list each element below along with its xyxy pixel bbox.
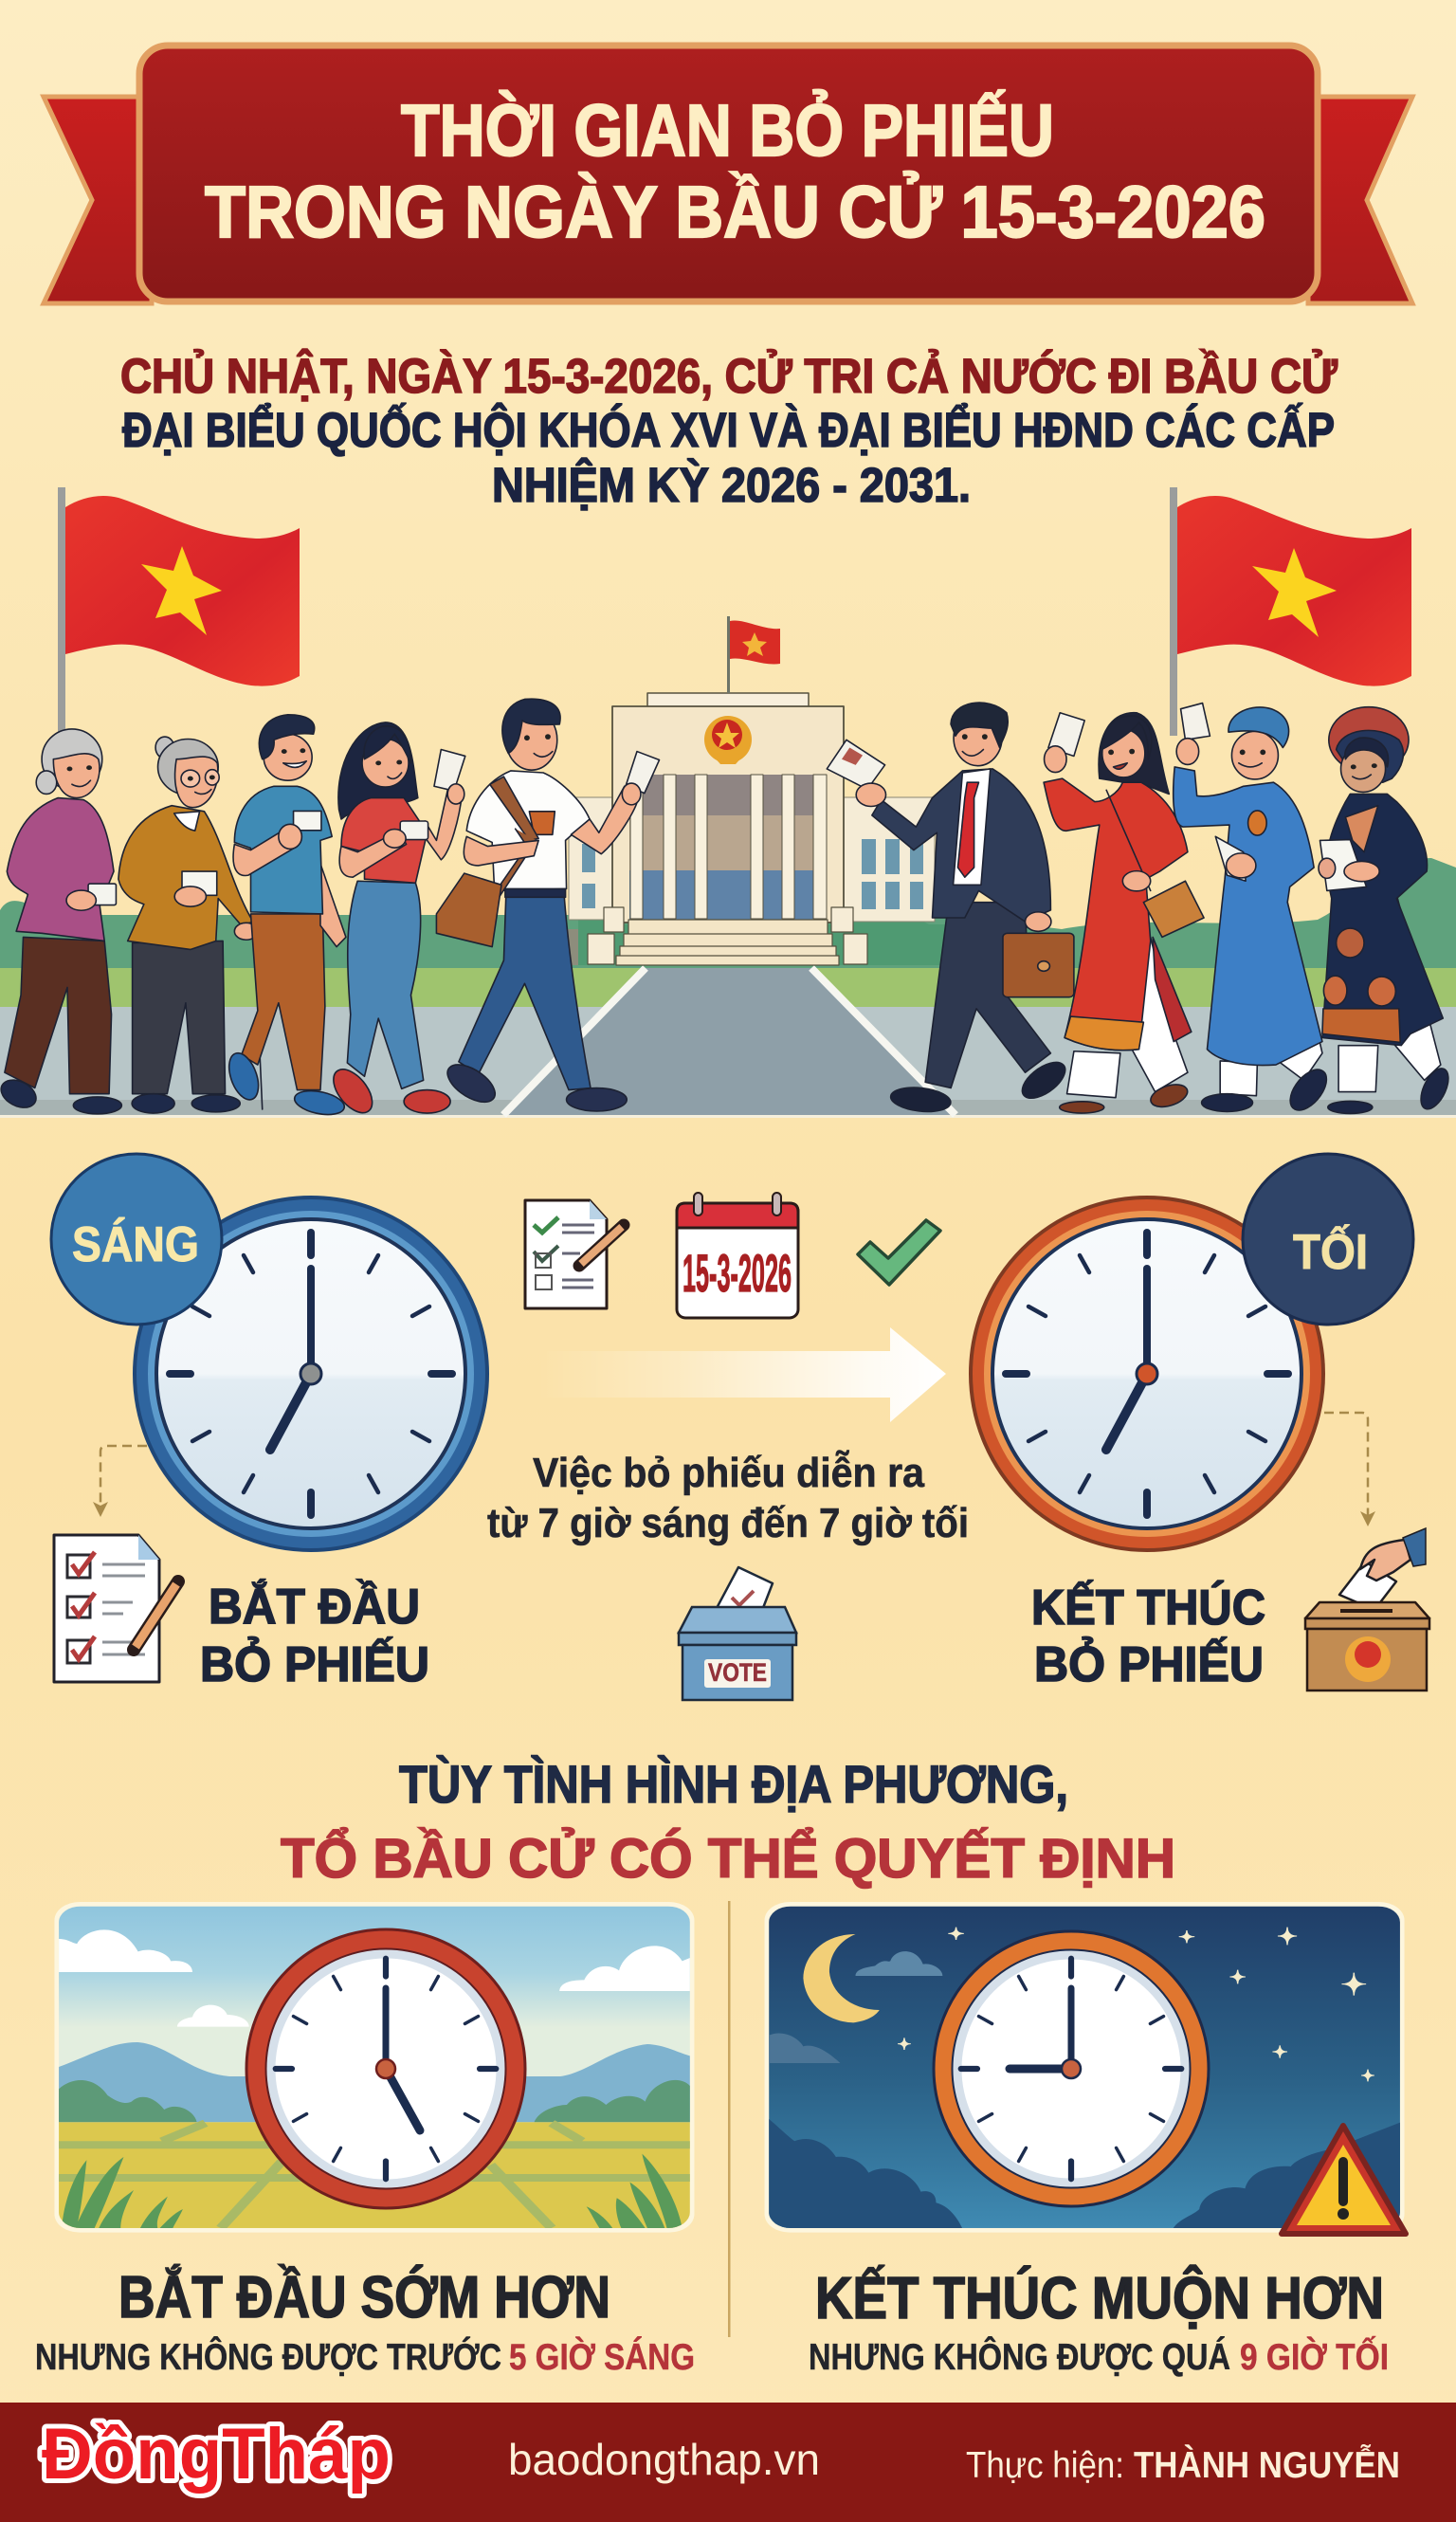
label: end of voting: BỎ PHIẾU [1034,1636,1264,1692]
voter: man in blue ao dai [1174,704,1334,1115]
heading: local decision: TỔ BẦU CỬ CÓ THỂ QUYẾT ĐỊNH [281,1828,1175,1890]
arrow: morning to evening [538,1327,946,1422]
left ribbon [44,97,152,303]
caption: earlier start [35,2265,695,2378]
website: baodongthap.vn [508,2435,820,2484]
landscape [0,858,1456,1118]
emblem [704,716,752,764]
caption: later end [809,2266,1389,2378]
voter: young man in blue t-shirt [224,715,348,1119]
credit: Thực hiện: [966,2445,1124,2486]
caption: earlier start: NHƯNG KHÔNG ĐƯỢC TRƯỚC [35,2335,501,2378]
morning scene [54,1902,694,2233]
clock showing 5 o'clock [246,1929,525,2208]
icon: ballot box VOTE [679,1567,796,1700]
voter: woman in dark ao dai with traditional hat [1319,707,1454,1113]
voter: man in dark suit with briefcase [827,703,1074,1115]
logo: ĐồngTháp [42,2414,391,2495]
caption: earlier start: BẮT ĐẦU SỚM HƠN [118,2265,610,2330]
intro text: CHỦ NHẬT, NGÀY 15-3-2026, CỬ TRI CẢ NƯỚC ĐI BẦU CỬ [120,348,1338,403]
flag right [1170,487,1411,736]
intro text: NHIỆM KỲ 2026 - 2031. [492,457,971,512]
icon: ballot box VOTE: VOTE [708,1658,767,1687]
title line 1: THỜI GIAN BỎ PHIẾU [401,89,1054,172]
heading: local decision: TÙY TÌNH HÌNH ĐỊA PHƯƠNG, [399,1754,1068,1814]
badge: morning: SÁNG [72,1217,199,1272]
flag left [58,487,300,732]
illustration: voters and assembly building [0,487,1456,1119]
icon: checklist with pencil [525,1200,624,1308]
voter: elderly woman in pink [0,729,121,1114]
caption: later end: 9 GIỜ TỐI [1240,2335,1389,2378]
caption: earlier start: 5 GIỜ SÁNG [509,2336,695,2378]
badge: evening: TỐI [1293,1224,1368,1280]
evening clock [971,1197,1323,1550]
intro text [120,348,1338,512]
dashed arrow: end [1324,1413,1368,1517]
voter: woman in red ao dai [1044,713,1204,1113]
banner panel [139,46,1318,302]
icon: ballot checklist [54,1535,178,1682]
icon: warning triangle [1282,2126,1406,2234]
text: voting hours: Việc bỏ phiếu diễn ra [533,1449,924,1496]
heading: local decision [281,1754,1175,1890]
badge: evening [1243,1154,1413,1325]
label: start of voting [200,1579,429,1692]
icon: calendar [677,1193,798,1318]
clock showing 9 o'clock [934,1931,1209,2206]
icon: hand casting ballot into wooden box [1305,1528,1429,1690]
label: start of voting: BẮT ĐẦU [209,1579,420,1635]
morning clock [135,1197,487,1550]
panel: later end [765,1902,1406,2378]
voter: man in white shirt with satchel [436,699,660,1111]
title banner [44,46,1412,303]
caption: later end: NHƯNG KHÔNG ĐƯỢC QUÁ [809,2335,1230,2378]
right voters [827,703,1454,1115]
night scene [765,1902,1405,2233]
dashed arrow: start [100,1446,147,1509]
building [531,616,1010,965]
right ribbon [1308,97,1412,303]
dashed arrowhead: end [1360,1511,1375,1526]
title line 2: TRONG NGÀY BẦU CỬ 15-3-2026 [205,171,1265,253]
rooftop flag [727,616,780,693]
text: voting hours [487,1449,969,1546]
panel: earlier start [35,1902,695,2378]
text: 15-3-2026 [682,1243,792,1303]
credit [966,2444,1400,2486]
left voters [0,699,660,1119]
voter: elderly woman with cane [118,737,263,1113]
divider [728,1901,730,2337]
badge: morning [51,1154,222,1325]
label: start of voting: BỎ PHIẾU [200,1636,429,1692]
caption: later end: KẾT THÚC MUỘN HƠN [815,2266,1384,2331]
label: end of voting [1031,1580,1265,1692]
dashed arrowhead: start [93,1502,108,1517]
icon: green check mark [858,1220,940,1285]
credit: THÀNH NGUYỄN [1134,2444,1400,2486]
label: end of voting: KẾT THÚC [1031,1580,1265,1636]
footer [0,2403,1456,2522]
text: voting hours: từ 7 giờ sáng đến 7 giờ tối [487,1500,969,1546]
voter: young woman in red t-shirt [325,722,465,1118]
